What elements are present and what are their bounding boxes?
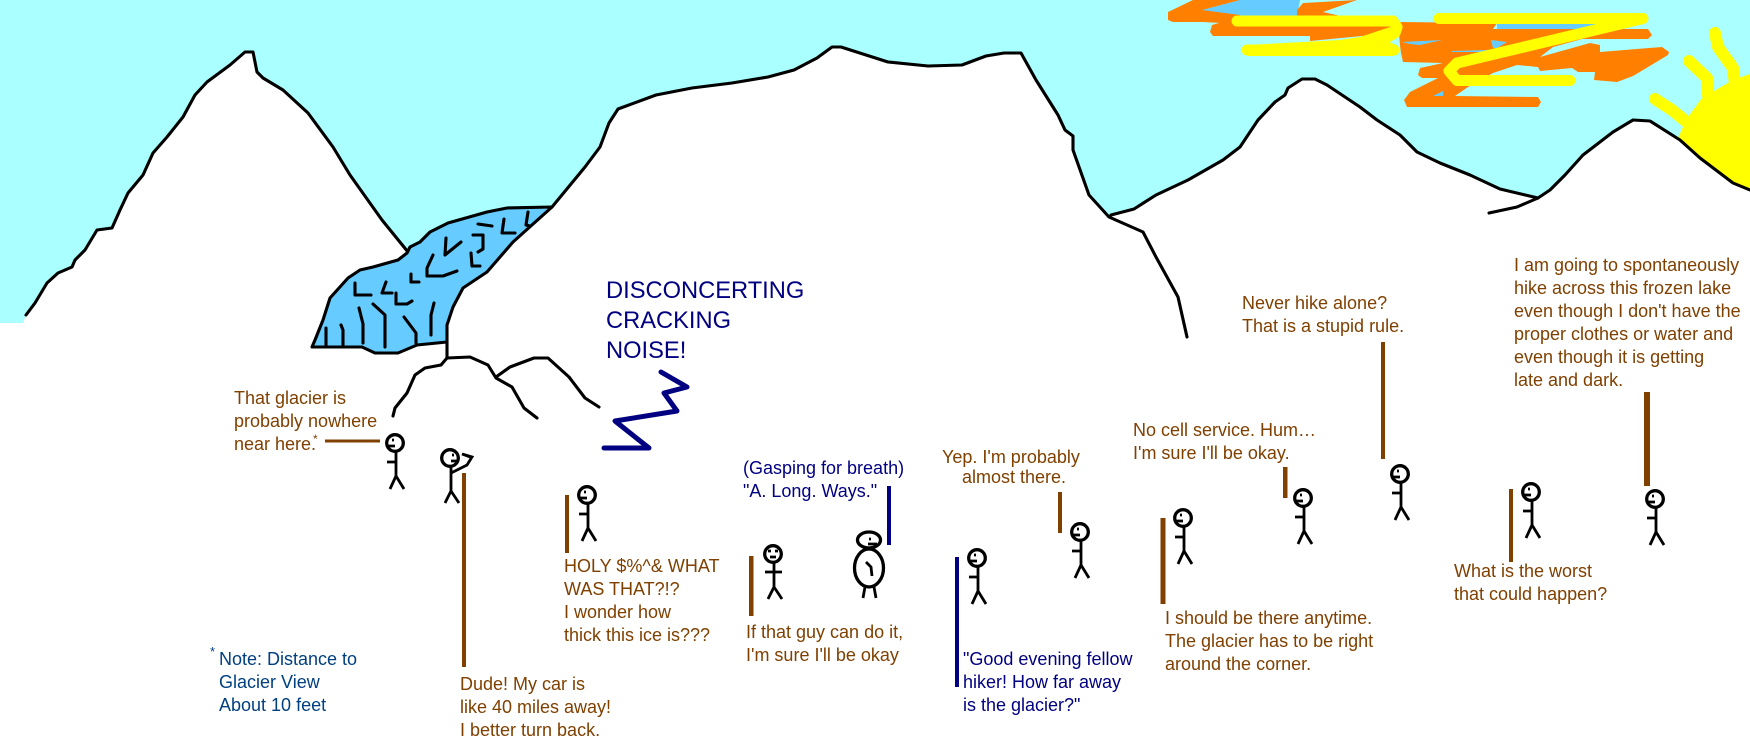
speech pointer [955,557,959,687]
sun [1655,33,1750,190]
stick figure 9 [1295,490,1312,544]
speech: spontaneously hike across frozen lake: hike across this frozen lake [1514,278,1731,298]
speech: what is the worst: that could happen? [1454,584,1607,604]
speech pointer [462,473,466,667]
speech: no cell service: No cell service. Hum… [1133,420,1316,440]
heavyset stick figure [854,532,884,598]
speech: good evening fellow hiker: hiker! How far away [963,672,1121,692]
speech pointer [887,486,891,545]
stick figure 7 [1072,524,1089,578]
speech: should be there anytime: The glacier has to be right [1165,631,1373,651]
mountain: center massif [552,47,1187,337]
speech: should be there anytime: I should be there anytime. [1165,608,1372,628]
footnote: distance to glacier view: Glacier View [219,672,321,692]
speech pointer [1058,492,1062,533]
speech: never hike alone: Never hike alone? [1242,293,1387,313]
speech: what is the worst: What is the worst [1454,561,1592,581]
speech: gasping a long ways: (Gasping for breath) [743,458,904,478]
mountain: left peak [26,52,408,315]
speech: that glacier is nowhere near: That glacier is [234,388,346,408]
speech: good evening fellow hiker: "Good evening fellow [963,649,1133,669]
speech: that glacier is nowhere near: near here. [234,434,316,454]
speech: car is 40 miles away: I better turn back. [460,720,600,740]
sunset clouds [1168,0,1669,107]
speech: holy what was that: WAS THAT?!? [564,579,680,599]
footnote: distance to glacier view: About 10 feet [219,695,326,715]
speech: gasping a long ways: "A. Long. Ways." [743,481,877,501]
stick figure 6 [969,550,986,604]
stick figure 8 [1175,510,1192,564]
mountain: right ridge [1111,79,1538,215]
stick figure 2 shading eyes [442,450,472,503]
icon: cracking noise zigzag [604,372,687,448]
caption: disconcerting cracking noise: CRACKING [606,308,731,334]
speech: never hike alone: That is a stupid rule. [1242,316,1404,336]
sky background [0,0,1750,323]
speech: if that guy can do it: If that guy can do it, [746,622,903,642]
caption: disconcerting cracking noise: DISCONCERTING [606,278,804,304]
speech: yep almost there: Yep. I'm probably [942,447,1080,467]
speech: holy what was that: thick this ice is??? [564,625,710,645]
speech pointer [749,556,754,616]
speech: spontaneously hike across frozen lake: late and dark. [1514,370,1623,390]
speech: no cell service: I'm sure I'll be okay. [1133,443,1290,463]
mountain: far right ridge [1489,120,1750,213]
stick figure 11 [1523,484,1540,538]
speech: spontaneously hike across frozen lake: I am going to spontaneously [1514,255,1739,275]
speech: that glacier is nowhere near: probably nowhere [234,411,377,431]
speech pointer [325,440,380,442]
stick figure 4 worried [765,546,782,599]
speech: spontaneously hike across frozen lake: even though I don't have the [1514,301,1741,321]
speech: car is 40 miles away: Dude! My car is [460,674,585,694]
footnote: distance to glacier view: * [210,644,215,659]
speech: yep almost there: almost there. [962,467,1066,487]
speech: if that guy can do it: I'm sure I'll be okay [746,645,899,665]
stick figure 12 [1647,491,1664,545]
speech: that glacier is nowhere near: * [313,432,318,446]
speech pointer [565,495,569,553]
speech: holy what was that: I wonder how [564,602,672,622]
stick figure 1 [387,435,404,489]
speech pointer [1381,342,1385,459]
speech: should be there anytime: around the corner. [1165,654,1311,674]
stick figure 3 [579,487,596,541]
speech: spontaneously hike across frozen lake: proper clothes or water and [1514,324,1733,344]
speech: car is 40 miles away: like 40 miles away! [460,697,611,717]
footnote: distance to glacier view: Note: Distance to [219,649,357,669]
speech: holy what was that: HOLY $%^& WHAT [564,556,719,576]
glacier [312,207,552,353]
speech: good evening fellow hiker: is the glacier?" [963,695,1080,715]
speech pointer [1283,467,1288,498]
stick figure 10 [1392,466,1409,520]
glacial stream and foothills [393,342,599,418]
caption: disconcerting cracking noise: NOISE! [606,338,686,364]
speech pointer [1509,489,1513,562]
speech: spontaneously hike across frozen lake: even though it is getting [1514,347,1704,367]
speech pointer [1644,392,1650,486]
speech pointer [1160,518,1166,604]
